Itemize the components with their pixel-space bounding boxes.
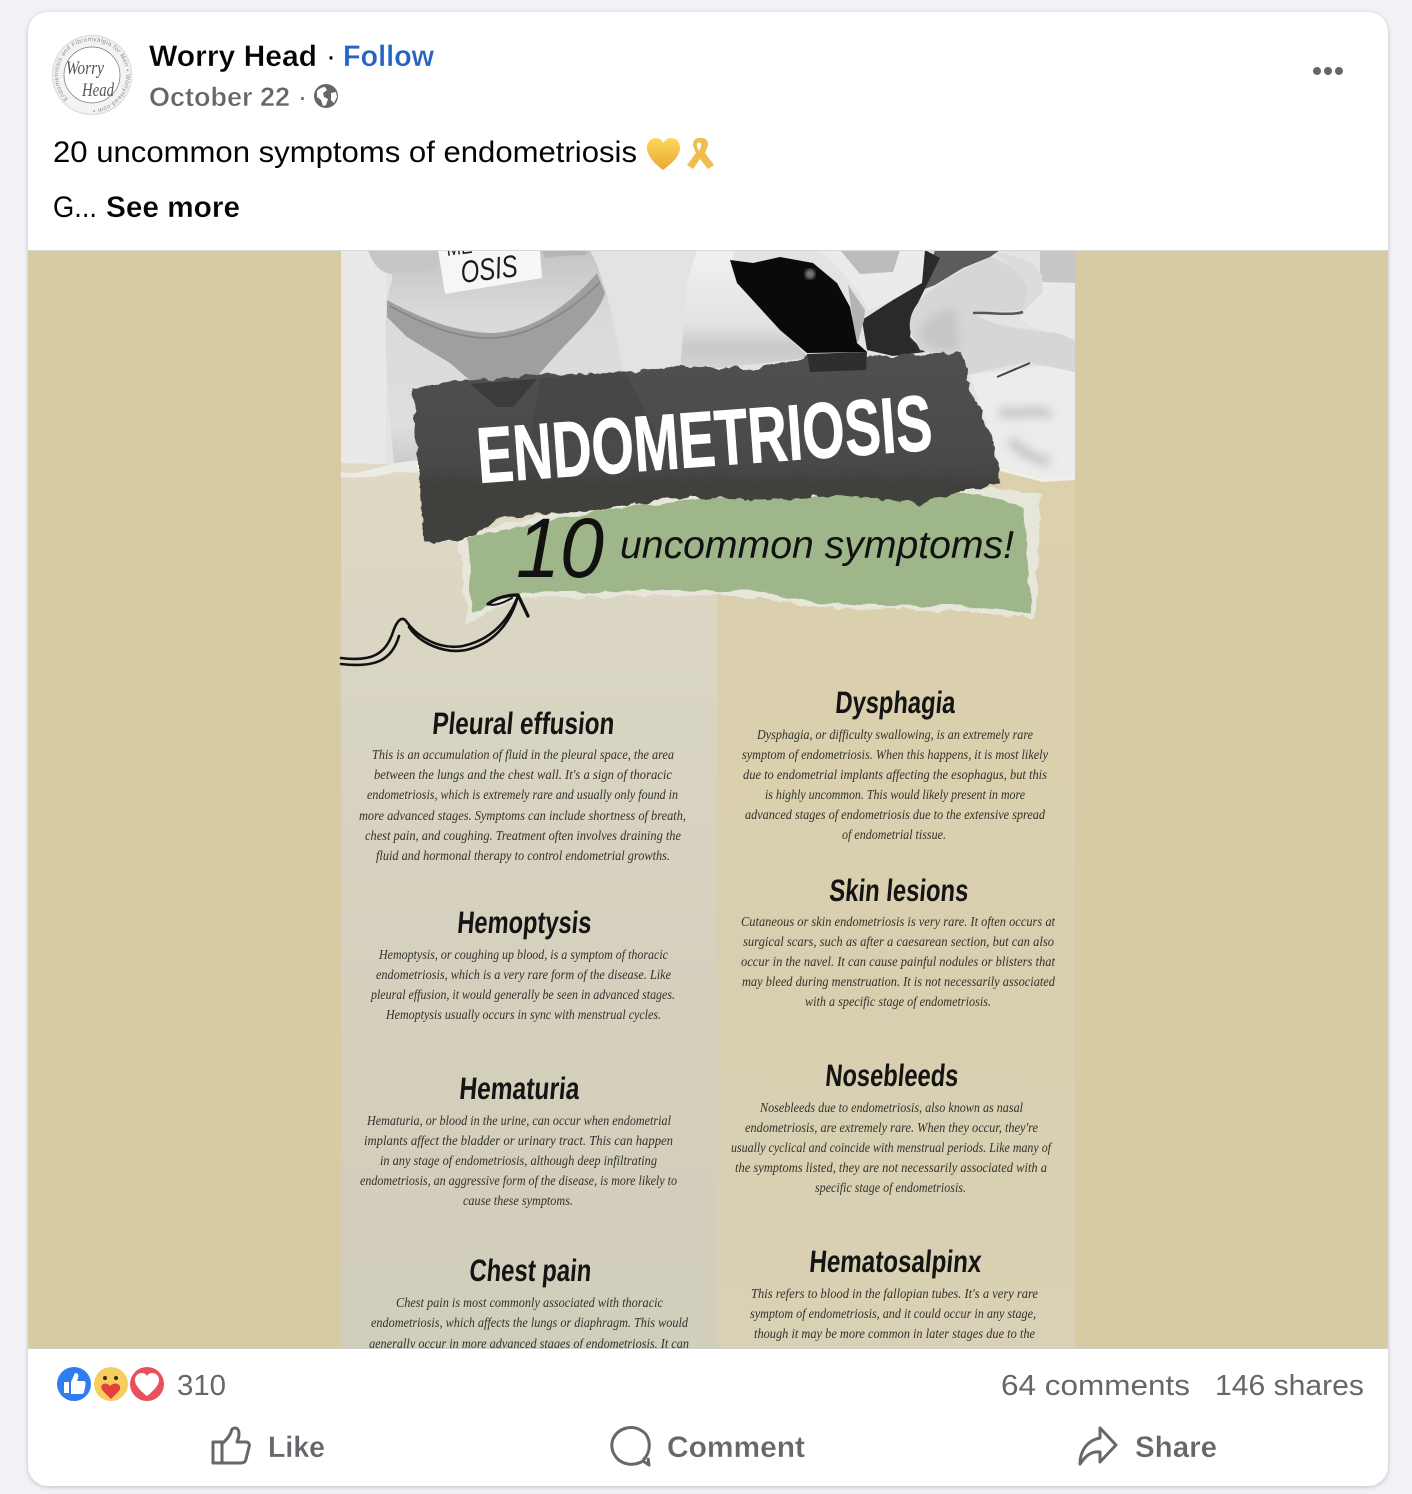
section: skin lesions: occur in the navel. It can cause painful nodules or blisters that bbox=[741, 954, 1056, 969]
photo: right hand bbox=[542, 251, 588, 258]
section: skin lesions: with a specific stage of endometriosis. bbox=[805, 994, 991, 1009]
section: chest pain: generally occur in more advanced stages of endometriosis. It can bbox=[369, 1336, 689, 1351]
dark torn paper bbox=[413, 352, 1002, 542]
page name and follow: Follow bbox=[343, 40, 435, 73]
section: dysphagia bbox=[742, 685, 1048, 842]
section: dysphagia: of endometrial tissue. bbox=[842, 827, 946, 842]
page name and follow: Worry Head bbox=[149, 40, 317, 73]
section: hematosalpinx bbox=[750, 1244, 1038, 1341]
infographic paper background bbox=[341, 455, 1075, 1349]
green torn paper bbox=[458, 488, 1040, 625]
comment button: Comment bbox=[667, 1431, 805, 1464]
photo: woman holding sign bbox=[368, 251, 616, 463]
post date: October 22 bbox=[149, 82, 290, 112]
section: hematosalpinx: This refers to blood in the fallopian tubes. It's a very rare bbox=[751, 1286, 1038, 1301]
section: hemoptysis bbox=[370, 905, 675, 1022]
section: hemoptysis: Hemoptysis bbox=[456, 905, 593, 940]
photo collage bbox=[341, 233, 1075, 480]
icon: page avatar: Head bbox=[81, 80, 114, 101]
section: nosebleeds: endometriosis, are extremely rare. When they occur, they're bbox=[745, 1120, 1038, 1135]
dark paper see-through: underwear bbox=[470, 379, 537, 407]
section: hemoptysis: pleural effusion, it would generally be seen in advanced stages. bbox=[370, 987, 675, 1002]
section: nosebleeds bbox=[731, 1058, 1053, 1195]
section: hematuria bbox=[360, 1071, 677, 1208]
section: nosebleeds: specific stage of endometriosis. bbox=[815, 1180, 966, 1195]
section: nosebleeds: usually cyclical and coincide with menstrual periods. Like many of bbox=[731, 1140, 1053, 1155]
photo: pillow bbox=[680, 250, 810, 372]
post header bbox=[52, 34, 1343, 116]
icon: page avatar: Worry bbox=[66, 58, 104, 79]
share button: Share bbox=[1135, 1431, 1217, 1464]
arrow pointing to subtitle bbox=[341, 595, 528, 665]
section: hemoptysis: endometriosis, which is a very rare form of the disease. Like bbox=[376, 967, 671, 982]
post image bbox=[28, 233, 1388, 1351]
icon: love reaction bbox=[128, 1365, 166, 1403]
section: chest pain: endometriosis, which affects the lungs or diaphragm. This would bbox=[371, 1315, 688, 1330]
icon: thumbs up bbox=[213, 1428, 249, 1463]
section: pleural effusion: This is an accumulation of fluid in the pleural space, the area bbox=[372, 747, 674, 762]
section: nosebleeds: Nosebleeds due to endometriosis, also known as nasal bbox=[759, 1100, 1023, 1115]
page name and follow: · bbox=[326, 40, 336, 73]
section: skin lesions: Cutaneous or skin endometriosis is very rare. It often occurs at bbox=[741, 914, 1056, 929]
icon: more options bbox=[1313, 67, 1343, 75]
section: hemoptysis: Hemoptysis usually occurs in sync with menstrual cycles. bbox=[385, 1007, 661, 1022]
icon: page avatar: Endometriosis and Fibromyalgia for Men • WorryHead.com • bbox=[54, 38, 130, 112]
post date: · bbox=[298, 82, 307, 112]
icon: awareness ribbon bbox=[687, 138, 714, 169]
section: hematuria: implants affect the bladder or urinary tract. This can happen bbox=[364, 1133, 673, 1148]
section: pleural effusion bbox=[359, 706, 686, 863]
icon: like reaction bbox=[55, 1365, 93, 1403]
photo: sign reading osis: ME bbox=[445, 233, 473, 261]
dark paper see-through: hair bbox=[807, 352, 867, 372]
reactions and counts bbox=[55, 1365, 1364, 1403]
section: hemoptysis: Hemoptysis, or coughing up blood, is a symptom of thoracic bbox=[378, 947, 668, 962]
image backdrop bbox=[28, 250, 1388, 1349]
see more line: See more bbox=[106, 191, 240, 224]
section: pleural effusion: fluid and hormonal therapy to control endometrial growths. bbox=[376, 848, 670, 863]
icon: care reaction bbox=[92, 1365, 130, 1403]
section: nosebleeds: the symptoms listed, they are not necessarily associated with a bbox=[735, 1160, 1047, 1175]
section: hematosalpinx: though it may be more common in later stages due to the bbox=[754, 1326, 1035, 1341]
column: right symptoms bbox=[731, 685, 1056, 1341]
section: skin lesions: Skin lesions bbox=[828, 873, 970, 908]
subtitle: 10 uncommon symptoms: 10 bbox=[516, 501, 604, 595]
comment count: 64 comments bbox=[1001, 1370, 1190, 1402]
photo: woman lying on bed bbox=[730, 250, 1075, 478]
subtitle: 10 uncommon symptoms bbox=[518, 518, 1014, 578]
section: hematosalpinx: symptom of endometriosis, and it could occur in any stage, bbox=[750, 1306, 1036, 1321]
reaction count: 310 bbox=[177, 1370, 226, 1402]
section: chest pain: Chest pain is most commonly associated with thoracic bbox=[396, 1295, 663, 1310]
section: skin lesions: surgical scars, such as after a caesarean section, but can also bbox=[743, 934, 1054, 949]
section: pleural effusion: Pleural effusion bbox=[431, 706, 616, 741]
icon: yellow heart bbox=[647, 138, 680, 170]
main title: ENDOMETRIOSIS bbox=[474, 378, 935, 500]
section: pleural effusion: endometriosis, which is extremely rare and usually only found in bbox=[367, 787, 678, 802]
section: pleural effusion: between the lungs and the chest wall. It's a sign of thoracic bbox=[374, 767, 672, 782]
photo: face bbox=[848, 285, 865, 342]
post caption bbox=[53, 136, 714, 224]
section: dysphagia: due to endometrial implants affecting the esophagus, but this bbox=[743, 767, 1047, 782]
section: pleural effusion: chest pain, and coughing. Treatment often involves draining the bbox=[365, 828, 681, 843]
see more line: G... bbox=[53, 191, 97, 224]
icon: speech bubble bbox=[612, 1428, 649, 1465]
column: left symptoms bbox=[359, 706, 689, 1351]
photo: sign reading osis bbox=[438, 251, 542, 294]
section: dysphagia: Dysphagia bbox=[834, 685, 958, 720]
action bar bbox=[213, 1428, 1217, 1465]
photo: left hand bbox=[368, 251, 392, 274]
section: dysphagia: is highly uncommon. This would likely present in more bbox=[765, 787, 1025, 802]
section: nosebleeds: Nosebleeds bbox=[824, 1058, 960, 1093]
section: hematuria: Hematuria, or blood in the urine, can occur when endometrial bbox=[366, 1113, 671, 1128]
section: dysphagia: Dysphagia, or difficulty swallowing, is an extremely rare bbox=[756, 727, 1033, 742]
section: dysphagia: advanced stages of endometriosis due to the extensive spread bbox=[745, 807, 1045, 822]
section: skin lesions: may bleed during menstruation. It is not necessarily associated bbox=[742, 974, 1055, 989]
section: hematuria: Hematuria bbox=[458, 1071, 582, 1106]
section: chest pain: Chest pain bbox=[468, 1253, 593, 1288]
photo: hair bbox=[730, 257, 867, 353]
section: hematuria: endometriosis, an aggressive form of the disease, is more likely to bbox=[360, 1173, 677, 1188]
share button bbox=[1080, 1428, 1217, 1464]
torn white photo edge bbox=[341, 459, 424, 477]
share count: 146 shares bbox=[1215, 1370, 1364, 1402]
section: chest pain bbox=[369, 1253, 689, 1351]
section: skin lesions bbox=[741, 873, 1056, 1009]
subtitle: 10 uncommon symptoms: uncommon symptoms! bbox=[620, 524, 1014, 567]
post caption: 20 uncommon symptoms of endometriosis bbox=[53, 136, 637, 169]
section: hematuria: cause these symptoms. bbox=[463, 1193, 573, 1208]
icon: globe bbox=[314, 84, 338, 108]
icon: share arrow bbox=[1080, 1428, 1116, 1464]
photo: sign reading osis: OSIS bbox=[459, 248, 520, 290]
comment button bbox=[612, 1428, 805, 1465]
like button bbox=[213, 1428, 325, 1464]
section: pleural effusion: more advanced stages. Symptoms can include shortness of breath, bbox=[359, 808, 686, 823]
section: hematuria: in any stage of endometriosis, although deep infiltrating bbox=[380, 1153, 657, 1168]
section: dysphagia: symptom of endometriosis. When this happens, it is most likely bbox=[742, 747, 1048, 762]
page name and follow bbox=[149, 40, 435, 73]
section: hematosalpinx: Hematosalpinx bbox=[808, 1244, 984, 1279]
like button: Like bbox=[268, 1431, 325, 1464]
